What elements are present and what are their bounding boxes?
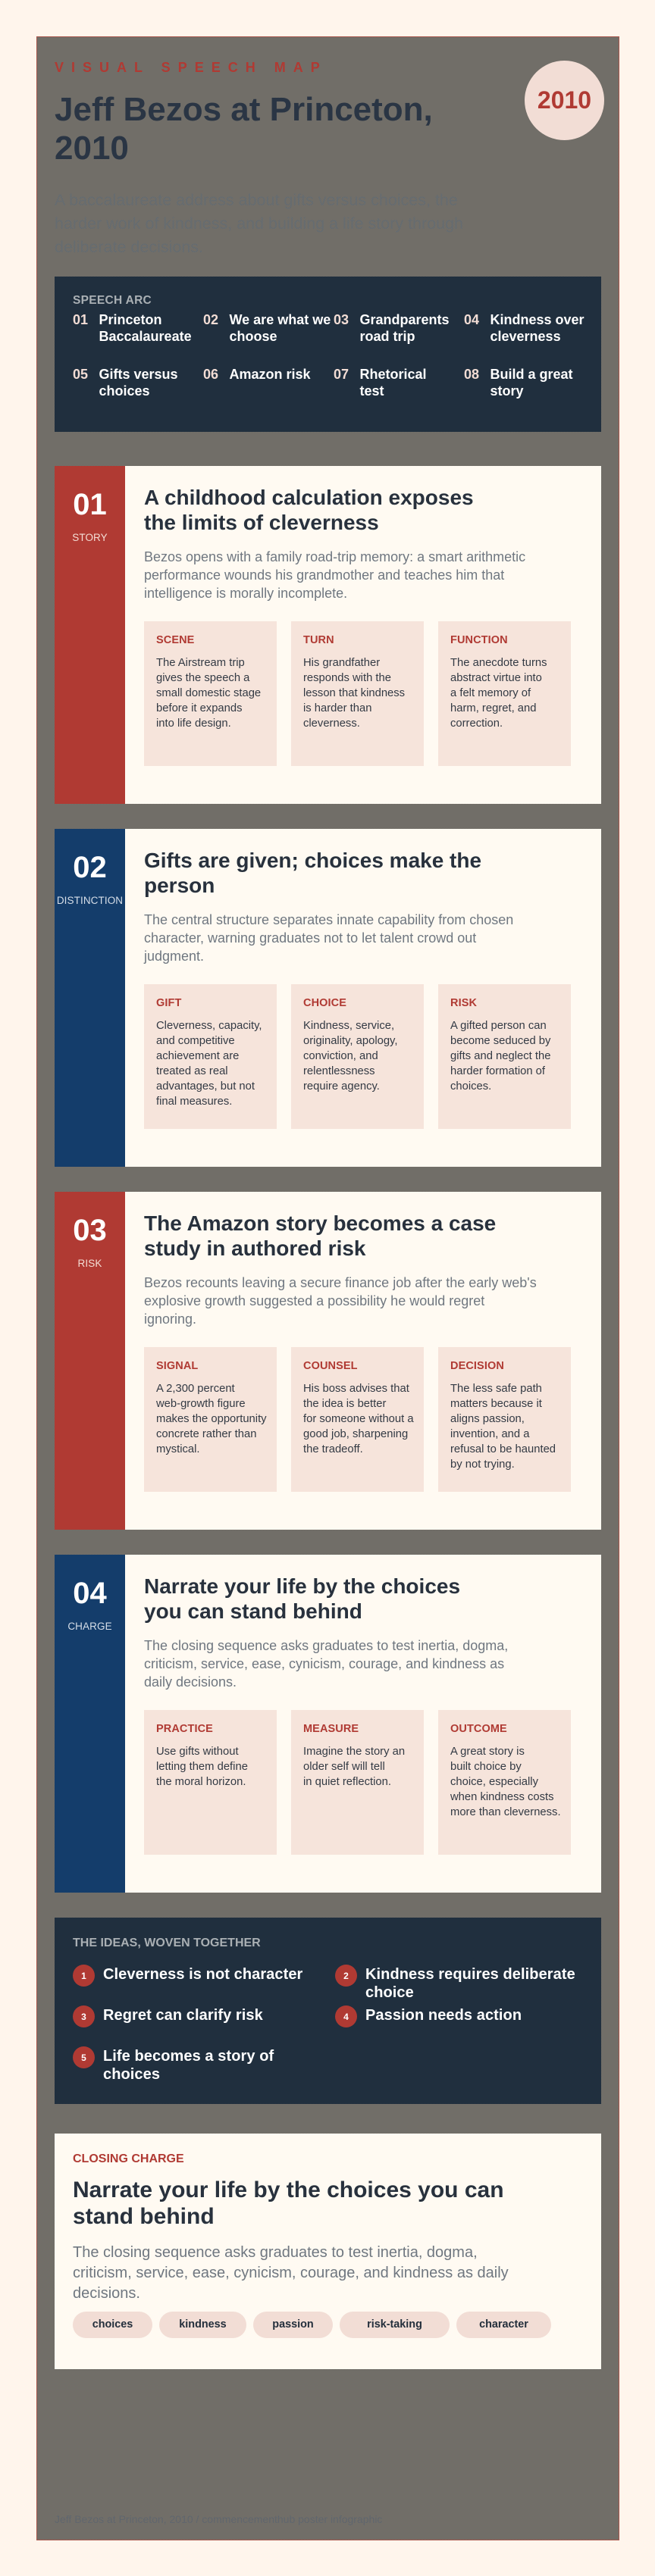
section 03 lead: Bezos recounts leaving a secure finance job after the early web's (144, 1275, 537, 1290)
card: outcome: A great story is (450, 1746, 525, 1758)
card: scene: gives the speech a (156, 672, 249, 684)
card: function: correction. (450, 717, 503, 730)
card: function: harm, regret, and (450, 702, 537, 714)
section 02 side label (55, 829, 125, 1167)
card: practice: PRACTICE (156, 1723, 213, 1735)
card: choice: CHOICE (303, 997, 346, 1009)
card: function (438, 621, 571, 766)
idea 1 (73, 1965, 302, 1987)
card: practice: Use gifts without (156, 1746, 239, 1758)
card: signal: mystical. (156, 1443, 200, 1455)
card: outcome: OUTCOME (450, 1723, 507, 1735)
year badge (525, 61, 604, 140)
idea 1: Cleverness is not character (103, 1966, 302, 1983)
panel: section 02 distinction (55, 829, 601, 1167)
card: turn: TURN (303, 634, 334, 646)
section 03 side label (55, 1192, 125, 1530)
card: measure: in quiet reflection. (303, 1776, 391, 1788)
arc item 05: choices (99, 383, 150, 399)
card: risk: RISK (450, 997, 477, 1009)
card: gift (144, 984, 277, 1129)
closing heading: stand behind (73, 2204, 215, 2229)
arc item 08: 08 (464, 367, 479, 382)
section 02 lead: character, warning graduates not to let talent crowd out (144, 930, 476, 946)
section 03 heading: The Amazon story becomes a case (144, 1211, 496, 1235)
idea 5: choices (103, 2066, 160, 2083)
arc item 03: Grandparents (359, 312, 450, 327)
arc item 04 (464, 312, 584, 344)
arc item 08: story (490, 383, 524, 399)
card: decision: DECISION (450, 1360, 504, 1372)
closing heading: Narrate your life by the choices you can (73, 2177, 504, 2202)
section 03 lead: ignoring. (144, 1311, 196, 1327)
card: decision: matters because it (450, 1398, 542, 1410)
title: Jeff Bezos at Princeton, (55, 91, 433, 128)
arc item 01 (73, 312, 192, 344)
card: signal: SIGNAL (156, 1360, 198, 1372)
section 04 side label: 04 (73, 1577, 107, 1610)
card: decision: by not trying. (450, 1458, 515, 1471)
subtitle (55, 191, 463, 256)
card: decision: aligns passion, (450, 1413, 525, 1425)
section 01 lead: Bezos opens with a family road-trip memory: a smart arithmetic (144, 549, 525, 564)
card: decision: invention, and a (450, 1428, 529, 1440)
card: scene: small domestic stage (156, 687, 261, 699)
card: gift: GIFT (156, 997, 181, 1009)
section 03 lead (144, 1275, 537, 1327)
card: turn: His grandfather (303, 657, 380, 669)
section 03 lead: explosive growth suggested a possibility he would regret (144, 1293, 484, 1308)
card: risk: harder formation of (450, 1065, 545, 1077)
card: choice: require agency. (303, 1080, 380, 1093)
section 02 heading: person (144, 874, 215, 897)
section 02 lead (144, 912, 513, 964)
section 02 lead: The central structure separates innate capability from chosen (144, 912, 513, 927)
footer: Jeff Bezos at Princeton, 2010 / commencementhub poster infographic (55, 2513, 382, 2525)
arc item 08: Build a great (490, 367, 573, 382)
card: outcome: more than cleverness. (450, 1806, 561, 1818)
closing heading (73, 2177, 504, 2229)
panel: section 04 charge (55, 1555, 601, 1893)
panel: section 01 story (55, 466, 601, 804)
section 01 heading (144, 486, 474, 534)
tag: risk-taking (340, 2312, 450, 2338)
section 04 lead: criticism, service, ease, cynicism, courage, and kindness as (144, 1656, 504, 1671)
section 04 heading: Narrate your life by the choices (144, 1574, 460, 1598)
card: outcome: when kindness costs (450, 1791, 554, 1803)
card: signal: A 2,300 percent (156, 1383, 235, 1395)
card: gift: and competitive (156, 1035, 235, 1047)
card: risk: become seduced by (450, 1035, 550, 1047)
tag: choices (73, 2312, 152, 2338)
section 03 side label: RISK (78, 1258, 102, 1269)
arc item 07: Rhetorical (359, 367, 427, 382)
card: outcome: built choice by (450, 1761, 522, 1773)
arc item 02: We are what we (229, 312, 331, 327)
subtitle: A baccalaureate address about gifts versus choices, the (55, 191, 458, 209)
section 01 heading: A childhood calculation exposes (144, 486, 474, 509)
arc item 08 (464, 367, 573, 399)
speech arc heading: SPEECH ARC (73, 294, 152, 307)
arc item 02: 02 (203, 312, 218, 327)
idea 3: 3 (81, 2012, 86, 2022)
section 04 side label (55, 1555, 125, 1893)
card: gift: treated as real (156, 1065, 228, 1077)
card: gift: Cleverness, capacity, (156, 1020, 262, 1032)
section 04 lead: The closing sequence asks graduates to test inertia, dogma, (144, 1638, 508, 1653)
section 04 side label: CHARGE (67, 1621, 112, 1632)
card: choice: relentlessness (303, 1065, 375, 1077)
section 02 lead: judgment. (144, 949, 204, 964)
arc item 05: Gifts versus (99, 367, 178, 382)
card: decision (438, 1347, 571, 1492)
arc item 07 (334, 367, 427, 399)
section 03 heading (144, 1211, 496, 1260)
closing lead: criticism, service, ease, cynicism, courage, and kindness as daily (73, 2265, 509, 2281)
card: decision: The less safe path (450, 1383, 542, 1395)
idea 3: Regret can clarify risk (103, 2007, 263, 2024)
section 01 heading: the limits of cleverness (144, 511, 379, 534)
card: counsel (291, 1347, 424, 1492)
card: decision: refusal to be haunted (450, 1443, 556, 1455)
card: outcome: choice, especially (450, 1776, 538, 1788)
closing lead (73, 2244, 509, 2302)
section 04 lead (144, 1638, 508, 1690)
card: turn: is harder than (303, 702, 371, 714)
section 01 lead (144, 549, 525, 601)
idea 4: 4 (343, 2012, 349, 2022)
section 02 heading (144, 849, 481, 897)
section 02 heading: Gifts are given; choices make the (144, 849, 481, 872)
tag: character (456, 2312, 551, 2338)
subtitle: deliberate decisions. (55, 238, 203, 256)
card: turn: cleverness. (303, 717, 360, 730)
arc item 04: 04 (464, 312, 479, 327)
arc item 07: 07 (334, 367, 349, 382)
card: scene: SCENE (156, 634, 194, 646)
idea 3 (73, 2005, 263, 2027)
subtitle: harder work of kindness, and building a life story through (55, 214, 463, 233)
card: measure (291, 1710, 424, 1855)
section 02 side label: 02 (73, 851, 107, 884)
card: measure: MEASURE (303, 1723, 359, 1735)
tag: choices: choices (92, 2318, 133, 2331)
section 01 side label: 01 (73, 488, 107, 521)
card: risk: gifts and neglect the (450, 1050, 550, 1062)
section 01 side label (55, 466, 125, 804)
card: function: a felt memory of (450, 687, 531, 699)
card: risk: choices. (450, 1080, 491, 1093)
card: counsel: His boss advises that (303, 1383, 409, 1395)
idea 2: 2 (343, 1971, 349, 1981)
card: choice: conviction, and (303, 1050, 378, 1062)
card: risk: A gifted person can (450, 1020, 547, 1032)
arc item 03 (334, 312, 450, 344)
tag: character: character (479, 2318, 528, 2331)
arc item 04: cleverness (490, 329, 561, 344)
arc item 06: 06 (203, 367, 218, 382)
card: turn (291, 621, 424, 766)
arc item 06: Amazon risk (229, 367, 311, 382)
section 02 side label: DISTINCTION (57, 895, 123, 906)
idea 4: Passion needs action (365, 2007, 522, 2024)
card: turn: responds with the (303, 672, 391, 684)
card: signal: makes the opportunity (156, 1413, 267, 1425)
card: counsel: good job, sharpening (303, 1428, 408, 1440)
idea 4 (335, 2005, 522, 2027)
idea 2 (335, 1965, 575, 2001)
card: scene: The Airstream trip (156, 657, 245, 669)
card: practice: the moral horizon. (156, 1776, 246, 1788)
section 03 heading: study in authored risk (144, 1236, 365, 1260)
card: counsel: the idea is better (303, 1398, 386, 1410)
card: signal: concrete rather than (156, 1428, 256, 1440)
arc item 03: road trip (359, 329, 415, 344)
section 04 heading: you can stand behind (144, 1599, 362, 1623)
eyebrow: VISUAL SPEECH MAP (55, 60, 328, 75)
card: measure: Imagine the story an (303, 1746, 405, 1758)
idea 5: Life becomes a story of (103, 2048, 274, 2065)
card: counsel: for someone without a (303, 1413, 414, 1425)
closing lead: decisions. (73, 2285, 140, 2302)
section 04 lead: daily decisions. (144, 1674, 237, 1690)
idea 2: choice (365, 1984, 414, 2001)
card: gift: advantages, but not (156, 1080, 255, 1093)
card: scene: before it expands (156, 702, 243, 714)
arc item 02 (203, 312, 331, 344)
tag: kindness: kindness (179, 2318, 227, 2331)
closing lead: The closing sequence asks graduates to test inertia, dogma, (73, 2244, 478, 2261)
title: 2010 (55, 130, 129, 167)
idea 1: 1 (81, 1971, 86, 1981)
card: choice: Kindness, service, (303, 1020, 394, 1032)
tag: passion (253, 2312, 333, 2338)
card: practice: letting them define (156, 1761, 248, 1773)
card: counsel: the tradeoff. (303, 1443, 363, 1455)
section 01 lead: performance wounds his grandmother and teaches him that (144, 567, 504, 583)
arc item 01: Princeton (99, 312, 162, 327)
arc item 05 (73, 367, 178, 399)
ideas heading: THE IDEAS, WOVEN TOGETHER (73, 1937, 261, 1949)
card: function: The anecdote turns (450, 657, 547, 669)
section 04 heading (144, 1574, 460, 1623)
idea 5: 5 (81, 2052, 86, 2063)
idea 2: Kindness requires deliberate (365, 1966, 575, 1983)
closing label: CLOSING CHARGE (73, 2152, 184, 2165)
card: scene: into life design. (156, 717, 231, 730)
card: function: abstract virtue into (450, 672, 542, 684)
arc item 02: choose (229, 329, 277, 344)
card: signal (144, 1347, 277, 1492)
card: signal: web-growth figure (156, 1398, 246, 1410)
card: risk (438, 984, 571, 1129)
card: scene (144, 621, 277, 766)
arc item 01: 01 (73, 312, 88, 327)
card: function: FUNCTION (450, 634, 508, 646)
panel: closing charge (55, 2134, 601, 2369)
card: turn: lesson that kindness (303, 687, 405, 699)
arc item 04: Kindness over (490, 312, 584, 327)
idea 5 (73, 2046, 274, 2083)
card: choice: originality, apology, (303, 1035, 397, 1047)
tag: kindness (159, 2312, 246, 2338)
panel: the ideas, woven together (55, 1918, 601, 2104)
panel: section 03 risk (55, 1192, 601, 1530)
arc item 01: Baccalaureate (99, 329, 192, 344)
card: outcome (438, 1710, 571, 1855)
arc item 05: 05 (73, 367, 88, 382)
section 01 lead: intelligence is morally incomplete. (144, 586, 347, 601)
arc item 03: 03 (334, 312, 349, 327)
card: measure: older self will tell (303, 1761, 385, 1773)
year badge: 2010 (537, 86, 591, 114)
tag: risk-taking: risk-taking (367, 2318, 422, 2331)
card: gift: achievement are (156, 1050, 239, 1062)
arc item 07: test (359, 383, 384, 399)
panel: speech arc (55, 277, 601, 432)
tag: passion: passion (272, 2318, 314, 2331)
card: choice (291, 984, 424, 1129)
section 01 side label: STORY (72, 532, 108, 543)
card: counsel: COUNSEL (303, 1360, 358, 1372)
card: gift: final measures. (156, 1096, 232, 1108)
title (55, 91, 433, 167)
section 03 side label: 03 (73, 1214, 107, 1247)
card: practice (144, 1710, 277, 1855)
